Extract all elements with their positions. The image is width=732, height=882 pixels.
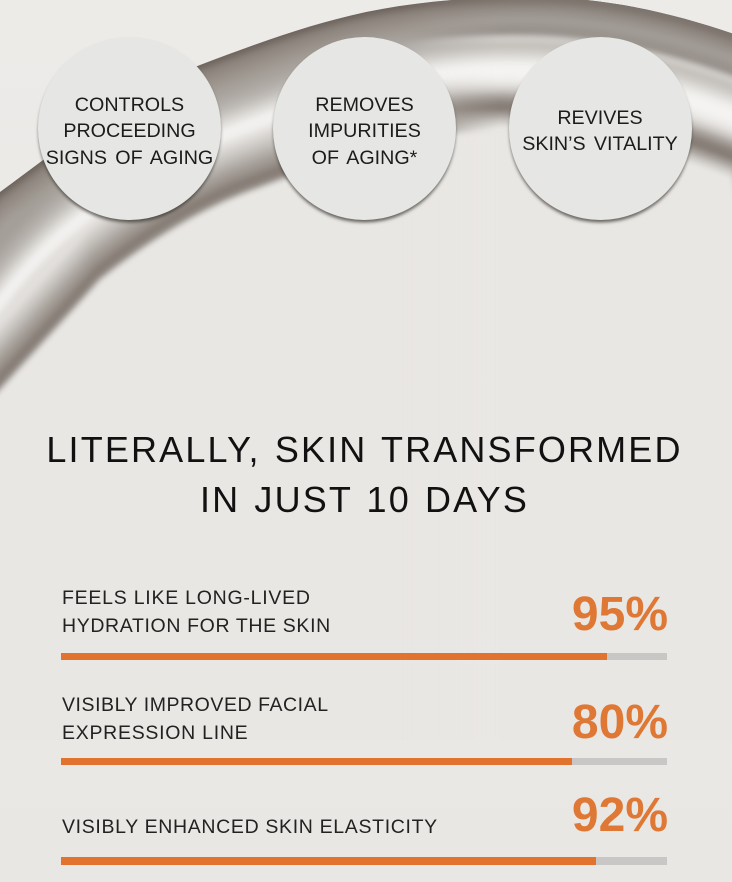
circle: controls proceeding signs of aging: CONTROLS (75, 94, 184, 116)
stat row: expression line 80% (61, 694, 668, 765)
circle: removes impurities of aging: REMOVES (315, 94, 414, 116)
stat label: hydration (62, 587, 331, 637)
stat value: 80%: 80% (572, 696, 668, 748)
progress bar: 95% (61, 653, 667, 660)
title (46, 429, 683, 520)
title: IN JUST 10 DAYS (200, 479, 529, 520)
circle: removes impurities of aging: OF AGING* (312, 146, 417, 168)
circle: removes impurities of aging: IMPURITIES (308, 120, 421, 142)
stat row: hydration 95% (61, 587, 668, 660)
stat label: elasticity: VISIBLY ENHANCED SKIN ELASTICITY (62, 816, 438, 838)
circle: revives skin's vitality: REVIVES (557, 106, 643, 128)
circle: controls proceeding signs of aging: PROCEEDING (63, 120, 196, 142)
title: LITERALLY, SKIN TRANSFORMED (46, 429, 683, 470)
stat label: expression line: EXPRESSION LINE (62, 722, 248, 744)
circle: controls proceeding signs of aging: SIGNS OF AGING (46, 146, 213, 168)
circle: revives skin's vitality: SKIN’S VITALITY (522, 133, 678, 155)
background with brushed metal ring (0, 0, 732, 395)
circle: removes impurities of aging (273, 37, 456, 220)
circle: revives skin's vitality (508, 37, 692, 220)
progress bar: 80% (61, 758, 667, 765)
stat value: 92%: 92% (572, 788, 668, 842)
stat label: hydration: FEELS LIKE LONG-LIVED (62, 587, 311, 609)
stat label: expression line (62, 694, 329, 744)
progress bar: 92% (61, 857, 667, 865)
stat value: 95%: 95% (572, 588, 668, 640)
stat label: hydration: HYDRATION FOR THE SKIN (62, 615, 331, 637)
stat label: expression line: VISIBLY IMPROVED FACIAL (62, 694, 329, 716)
circle: controls proceeding signs of aging (38, 37, 221, 220)
stat row: elasticity 92% (61, 788, 668, 865)
